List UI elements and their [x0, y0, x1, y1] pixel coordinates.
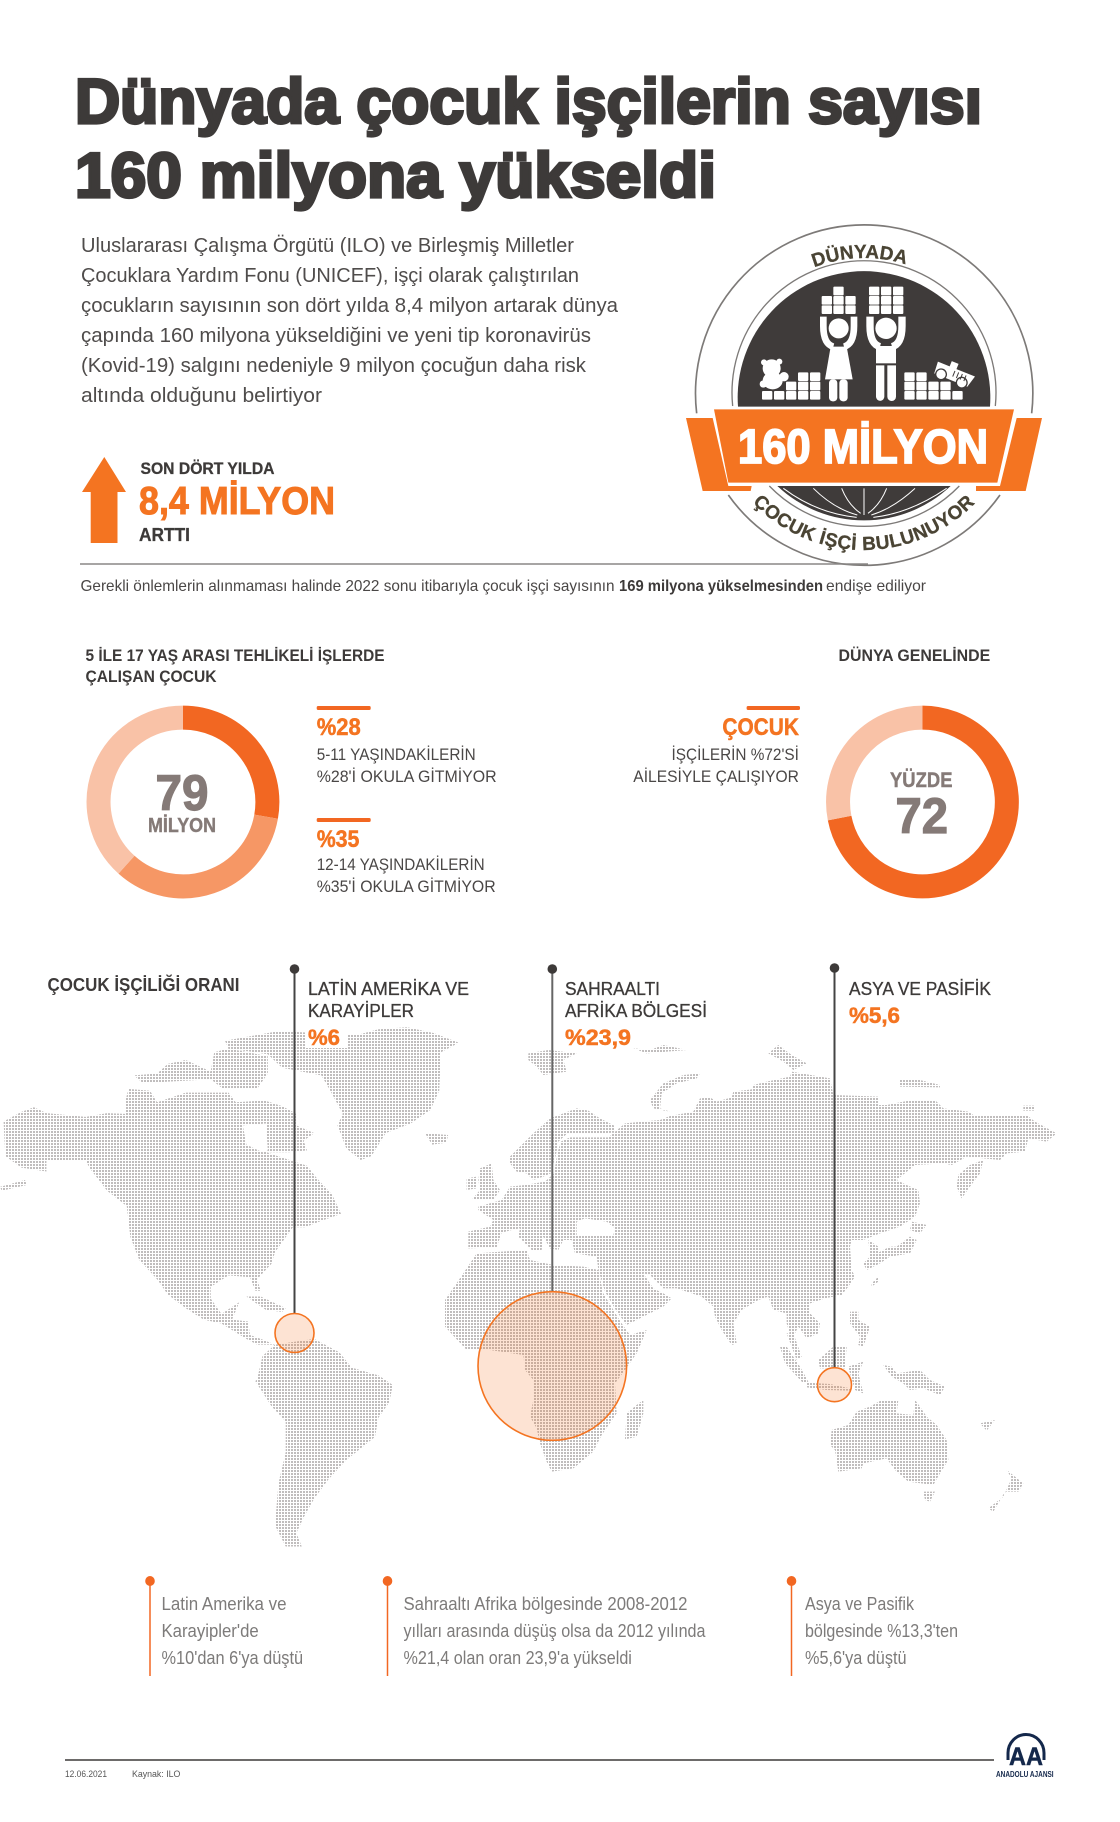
stat: %28: %28 [317, 714, 361, 741]
intro text block: Uluslararası Çalışma Örgütü (ILO) ve Birleşmiş Milletler [81, 235, 574, 257]
intro text block: altında olduğunu belirtiyor [81, 385, 322, 407]
donut center label: YÜZDE 72 [890, 769, 952, 844]
stat: family work: İŞÇİLERİN %72'Sİ [672, 745, 799, 764]
panel: hazardous work heading: 5 İLE 17 YAŞ ARASI TEHLİKELİ İŞLERDE [86, 646, 384, 665]
label: Asia and Pacific: %5,6 [849, 1003, 900, 1028]
donut chart: 79 million [99, 718, 267, 886]
icon: girl figure [823, 317, 854, 401]
footer: date and source: Kaynak: ILO [132, 1769, 180, 1779]
logo: Anadolu Ajansı: ANADOLU AJANSI [996, 1769, 1054, 1779]
icon: blocks left stack [762, 372, 820, 400]
title [75, 67, 982, 211]
note: Sub-Saharan Africa: %21,4 olan oran 23,9'a yükseldi [404, 1648, 632, 1668]
footer: date and source [65, 1769, 180, 1779]
stat: family work [633, 706, 800, 786]
label: Latin America: KARAYİPLER [308, 1001, 414, 1021]
logo: Anadolu Ajansı: AA [1009, 1743, 1043, 1771]
map heading: ÇOCUK İŞÇİLİĞİ ORANI [48, 974, 240, 995]
note: Sub-Saharan Africa [383, 1576, 706, 1676]
icon: toy truck [932, 356, 977, 391]
map marker: Sub-Saharan Africa [478, 964, 627, 1440]
note: Latin America: %10'dan 6'ya düştü [162, 1648, 303, 1668]
curved label: ÇOCUK İŞÇİ BULUNUYOR: ÇOCUK İŞÇİ BULUNUYOR [754, 496, 976, 553]
icon: toy bear [760, 359, 789, 389]
intro text block: çapında 160 milyona yükseldiğini ve yeni tip koronavirüs [81, 325, 591, 347]
label: Sub-Saharan Africa: %23,9 [565, 1025, 631, 1050]
icon: boy figure [870, 317, 902, 401]
ribbon label: 160 MİLYON [738, 421, 988, 474]
callout: 8,4 million increase: SON DÖRT YILDA [140, 459, 274, 478]
stat: %35: %35 [317, 826, 359, 853]
curved label: DÜNYADA: DÜNYADA [811, 244, 906, 267]
callout: 8,4 million increase [139, 459, 335, 545]
forecast sentence: Gerekli önlemlerin alınmaması halinde 2022 sonu itibarıyla çocuk işçi sayısının [80, 578, 614, 595]
donut center label: YÜZDE 72: YÜZDE [890, 769, 952, 792]
stat: %28 [317, 706, 497, 786]
stat: %35: %35'İ OKULA GİTMİYOR [317, 877, 496, 896]
label: Asia and Pacific: ASYA VE PASİFİK [849, 979, 991, 999]
map marker: Latin America [275, 964, 314, 1352]
note: Asia and Pacific: bölgesinde %13,3'ten [805, 1621, 958, 1641]
panel: worldwide heading: DÜNYA GENELİNDE [838, 646, 990, 665]
stat: %28: %28'İ OKULA GİTMİYOR [317, 767, 497, 786]
label: Sub-Saharan Africa: AFRİKA BÖLGESİ [565, 1001, 707, 1021]
stat: family work: ÇOCUK [722, 714, 799, 741]
icon: up arrow [82, 457, 126, 543]
callout: 8,4 million increase: 8,4 MİLYON [139, 480, 335, 523]
donut center label: 79 MİLYON: 79 [156, 765, 208, 821]
forecast sentence [80, 578, 927, 595]
note: Asia and Pacific: Asya ve Pasifik [805, 1594, 915, 1614]
donut center label: 79 MİLYON: MİLYON [148, 814, 216, 837]
footer rule [65, 1759, 994, 1761]
dotted world map [0, 1027, 1055, 1546]
intro text block: çocukların sayısının son dört yılda 8,4 milyon artarak dünya [81, 295, 619, 317]
note: Latin America [145, 1576, 303, 1676]
stat: %35: 12-14 YAŞINDAKİLERİN [317, 855, 485, 874]
note: Latin America: Karayipler'de [162, 1621, 259, 1641]
note: Asia and Pacific [787, 1576, 958, 1676]
label: Latin America [305, 979, 469, 1050]
panel: hazardous work heading [86, 646, 384, 686]
logo: Anadolu Ajansı [996, 1734, 1054, 1779]
badge: 160 million child workers [686, 224, 1042, 566]
note: Sub-Saharan Africa: Sahraaltı Afrika bölgesinde 2008-2012 [404, 1594, 688, 1614]
note: Latin America: Latin Amerika ve [162, 1594, 286, 1614]
donut chart: yüzde 72 [838, 718, 1007, 886]
title: Dünyada çocuk işçilerin sayısı [75, 67, 982, 137]
icon: blocks right stack [904, 372, 963, 400]
icon: blocks carried by the girl [822, 287, 856, 314]
label: Latin America: LATİN AMERİKA VE [308, 979, 469, 999]
label: Sub-Saharan Africa: SAHRAALTI [565, 979, 660, 999]
ribbon tails [686, 418, 1042, 491]
ribbon center [714, 409, 1014, 483]
forecast sentence: 169 milyona yükselmesinden [619, 578, 823, 595]
stat: family work: AİLESİYLE ÇALIŞIYOR [633, 767, 799, 786]
label: Asia and Pacific [849, 979, 991, 1028]
intro text block: Çocuklara Yardım Fonu (UNICEF), işçi olarak çalıştırılan [81, 265, 579, 287]
badge rings and dark globe [686, 225, 1042, 565]
intro text block: (Kovid-19) salgını nedeniyle 9 milyon çocuğun daha risk [81, 355, 587, 377]
donut center label: YÜZDE 72: 72 [896, 788, 948, 844]
note: Asia and Pacific: %5,6'ya düştü [805, 1648, 906, 1668]
stat: %35 [317, 818, 496, 896]
label: Latin America: %6 [308, 1025, 340, 1050]
icon: blocks carried by the boy [869, 287, 903, 314]
forecast sentence: endişe ediliyor [826, 578, 927, 595]
divider line [80, 563, 868, 565]
label: Sub-Saharan Africa [565, 979, 707, 1050]
title: 160 milyona yükseldi [75, 141, 716, 211]
panel: hazardous work heading: ÇALIŞAN ÇOCUK [86, 667, 217, 686]
note: Sub-Saharan Africa: yılları arasında düşüş olsa da 2012 yılında [404, 1621, 706, 1641]
donut center label: 79 MİLYON [148, 765, 216, 837]
stat: %28: 5-11 YAŞINDAKİLERİN [317, 745, 476, 764]
footer: date and source: 12.06.2021 [65, 1769, 107, 1779]
callout: 8,4 million increase: ARTTI [139, 525, 190, 545]
intro text block [81, 235, 619, 407]
map marker: Asia and Pacific [818, 963, 852, 1402]
